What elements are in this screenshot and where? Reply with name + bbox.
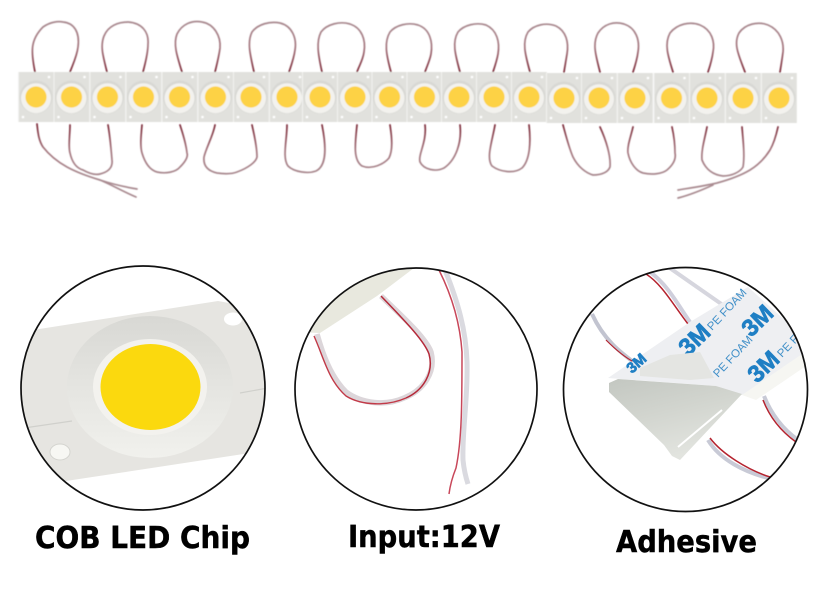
panel: COB LED chip close-up <box>20 266 270 510</box>
panel: adhesive backing close-up <box>564 264 819 512</box>
3M printing: 3M <box>736 300 779 342</box>
top LED module strip with wire loops <box>18 22 797 198</box>
module body strip <box>743 361 804 400</box>
bottom wire loops and tails <box>37 124 778 198</box>
label: Adhesive: Adhesive <box>616 525 757 560</box>
3M printing: PE FOAM <box>775 314 819 360</box>
circle outline <box>295 268 537 510</box>
underside of module <box>609 379 742 460</box>
top wire loops <box>32 22 783 72</box>
chip board <box>20 301 270 481</box>
mounting hole bottom <box>50 444 70 460</box>
adhesive foam tape <box>608 287 818 395</box>
3M printing: 3M <box>673 319 716 361</box>
label: Input:12V: Input:12V <box>348 520 501 555</box>
LED modules <box>18 72 797 123</box>
reflector rim <box>82 316 218 458</box>
label: COB LED Chip: COB LED Chip <box>35 521 250 556</box>
3M printing <box>626 288 796 382</box>
3M printing: 3M <box>623 350 650 377</box>
3M printing: PE FOAM <box>705 287 749 333</box>
module edge <box>310 269 412 333</box>
white ring <box>93 339 207 422</box>
3M printing: 3M <box>742 346 785 388</box>
wires behind <box>592 264 798 478</box>
wire loop <box>314 296 432 404</box>
circle outline <box>564 268 808 512</box>
3M printing: PE FOAM <box>711 334 755 380</box>
module edge highlight <box>678 410 722 447</box>
folded tape flap <box>640 352 714 380</box>
panel: 12V input wires close-up <box>295 268 537 510</box>
circle outline <box>21 266 265 510</box>
long wire pair <box>439 270 468 494</box>
mounting hole top <box>224 312 242 326</box>
yellow COB emitter <box>100 344 200 430</box>
